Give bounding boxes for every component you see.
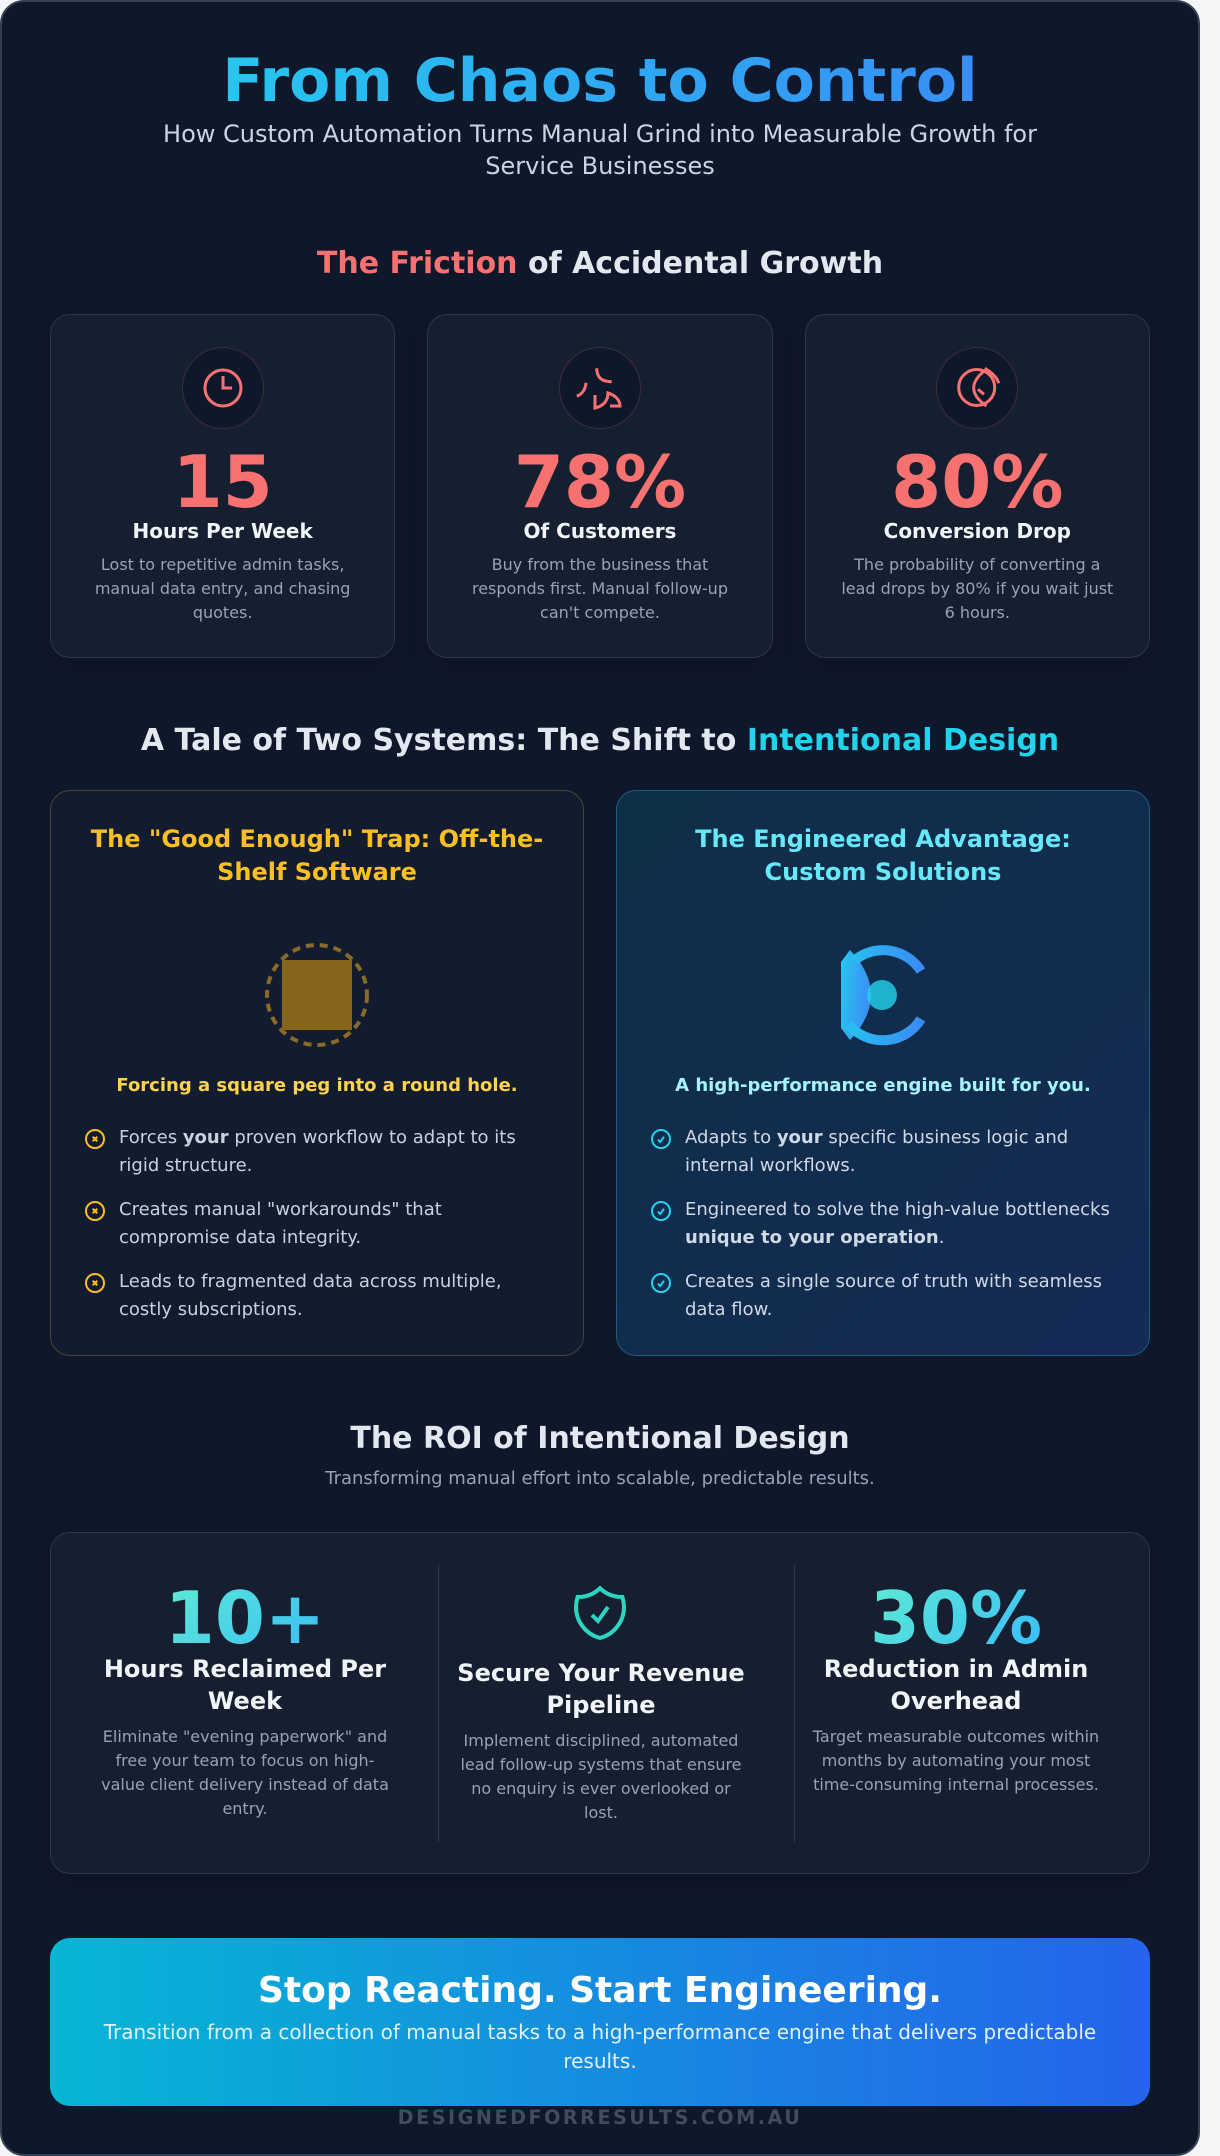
icon: broken chat (559, 347, 641, 429)
panel heading (90, 825, 543, 886)
column description: lost. (584, 1803, 618, 1822)
subtitle (163, 120, 1037, 180)
icon: clock (182, 347, 264, 429)
caption: Forcing a square peg into a round hole. (116, 1074, 518, 1096)
stat description (472, 554, 728, 622)
stat description: 6 hours. (945, 602, 1010, 622)
column title: Overhead (891, 1687, 1021, 1715)
stat description: The probability of converting a (854, 554, 1100, 574)
list item: Adapts to your specific business logic and (685, 1126, 1068, 1148)
CTA heading: Stop Reacting. Start Engineering. (258, 1970, 942, 2010)
column title: Secure Your Revenue (457, 1659, 745, 1687)
list item: rigid structure. (119, 1154, 252, 1176)
icon: shield check (574, 1586, 626, 1640)
list item: data flow. (685, 1298, 772, 1320)
heading: two systems: A Tale of Two Systems: The Shift to Intentional Design (141, 723, 1059, 758)
big number: 10+ (165, 1576, 325, 1660)
stat label: Conversion Drop (884, 519, 1071, 543)
panel: engineered advantage (616, 790, 1150, 1356)
list item: Engineered to solve the high-value bottlenecks (685, 1198, 1110, 1220)
stat description (841, 554, 1113, 622)
ROI subtitle: Transforming manual effort into scalable, predictable results. (325, 1468, 875, 1489)
panel heading (695, 825, 1071, 886)
column title: Pipeline (546, 1691, 656, 1719)
column description: time-consuming internal processes. (813, 1775, 1099, 1794)
heading: friction: The Friction of Accidental Growth (317, 246, 883, 281)
CTA text: results. (563, 2049, 637, 2073)
panel heading: Custom Solutions (765, 858, 1001, 886)
column title (457, 1659, 745, 1719)
column title: Week (208, 1687, 282, 1715)
stat number: 80% (891, 440, 1063, 524)
column description (101, 1727, 389, 1818)
list item: compromise data integrity. (119, 1226, 361, 1248)
column description (812, 1727, 1099, 1794)
stat description: Buy from the business that (492, 554, 708, 574)
big number: 30% (870, 1576, 1042, 1660)
column description: Implement disciplined, automated (464, 1731, 738, 1750)
list item (119, 1198, 442, 1248)
column description: free your team to focus on high- (116, 1751, 374, 1770)
stat label: Hours Per Week (133, 519, 313, 543)
list item: costly subscriptions. (119, 1298, 303, 1320)
subtitle: Service Businesses (485, 152, 715, 180)
call to action banner (50, 1938, 1150, 2106)
column title: Hours Reclaimed Per (104, 1655, 386, 1683)
panel: stat 15 hours (50, 314, 395, 658)
list item: unique to your operation. (685, 1226, 944, 1248)
list item: Creates a single source of truth with seamless (685, 1270, 1102, 1292)
icon: conversion drop (936, 347, 1018, 429)
column description: value client delivery instead of data (101, 1775, 389, 1794)
stat description: quotes. (193, 602, 252, 622)
CTA text: Transition from a collection of manual tasks to a high-performance engine that delivers predictable (104, 2020, 1096, 2044)
column title (104, 1655, 386, 1715)
stat description: can't compete. (540, 602, 660, 622)
list item: internal workflows. (685, 1154, 856, 1176)
column title: Reduction in Admin (824, 1655, 1088, 1683)
stat description: manual data entry, and chasing (95, 578, 350, 598)
title (50, 44, 1150, 116)
list item (685, 1270, 1102, 1320)
panel: stat 80 percent (805, 314, 1150, 658)
column title (824, 1655, 1088, 1715)
stat number: 15 (173, 440, 273, 524)
subtitle: How Custom Automation Turns Manual Grind into Measurable Growth for (163, 120, 1037, 148)
CTA text (104, 2020, 1096, 2073)
list item: Creates manual "workarounds" that (119, 1198, 442, 1220)
icon: check circle (651, 1201, 671, 1221)
column: secure pipeline (457, 1586, 745, 1822)
stat number: 78% (514, 440, 686, 524)
panel heading: The Engineered Advantage: (695, 825, 1071, 853)
column description: lead follow-up systems that ensure (460, 1755, 742, 1774)
list item (685, 1126, 1068, 1176)
icon: check circle (651, 1273, 671, 1293)
list item: Forces your proven workflow to adapt to its (119, 1126, 516, 1148)
list item: Leads to fragmented data across multiple, (119, 1270, 502, 1292)
column description: entry. (222, 1799, 268, 1818)
list item (119, 1270, 502, 1320)
column description: months by automating your most (822, 1751, 1090, 1770)
icon: x circle (85, 1129, 105, 1149)
stat description: Lost to repetitive admin tasks, (101, 554, 344, 574)
column description (460, 1731, 742, 1822)
heading: ROI: The ROI of Intentional Design (350, 1421, 850, 1456)
stat description: responds first. Manual follow-up (472, 578, 728, 598)
panel: stat 78 percent (427, 314, 773, 658)
caption: A high-performance engine built for you. (675, 1074, 1091, 1096)
panel: ROI stats (50, 1532, 1150, 1874)
list item (685, 1198, 1110, 1248)
stat label: Of Customers (524, 519, 676, 543)
column description: Target measurable outcomes within (813, 1727, 1099, 1746)
panel heading: The "Good Enough" Trap: Off-the- (91, 825, 543, 853)
list item (119, 1126, 516, 1176)
stat description: lead drops by 80% if you wait just (841, 578, 1113, 598)
icon: x circle (85, 1201, 105, 1221)
column description: no enquiry is ever overlooked or (471, 1779, 731, 1798)
column: 10+ hours (101, 1576, 389, 1818)
panel: good enough trap (50, 790, 584, 1356)
column: 30 percent (812, 1576, 1099, 1794)
icon: engine (841, 945, 926, 1046)
icon: check circle (651, 1129, 671, 1149)
stat description (95, 554, 350, 622)
icon: square peg in round hole (265, 943, 369, 1047)
title: From Chaos to Control (222, 46, 978, 116)
icon: x circle (85, 1273, 105, 1293)
column description: Eliminate "evening paperwork" and (103, 1727, 387, 1746)
panel heading: Shelf Software (217, 858, 417, 886)
footer: DESIGNEDFORRESULTS.COM.AU (398, 2106, 802, 2128)
